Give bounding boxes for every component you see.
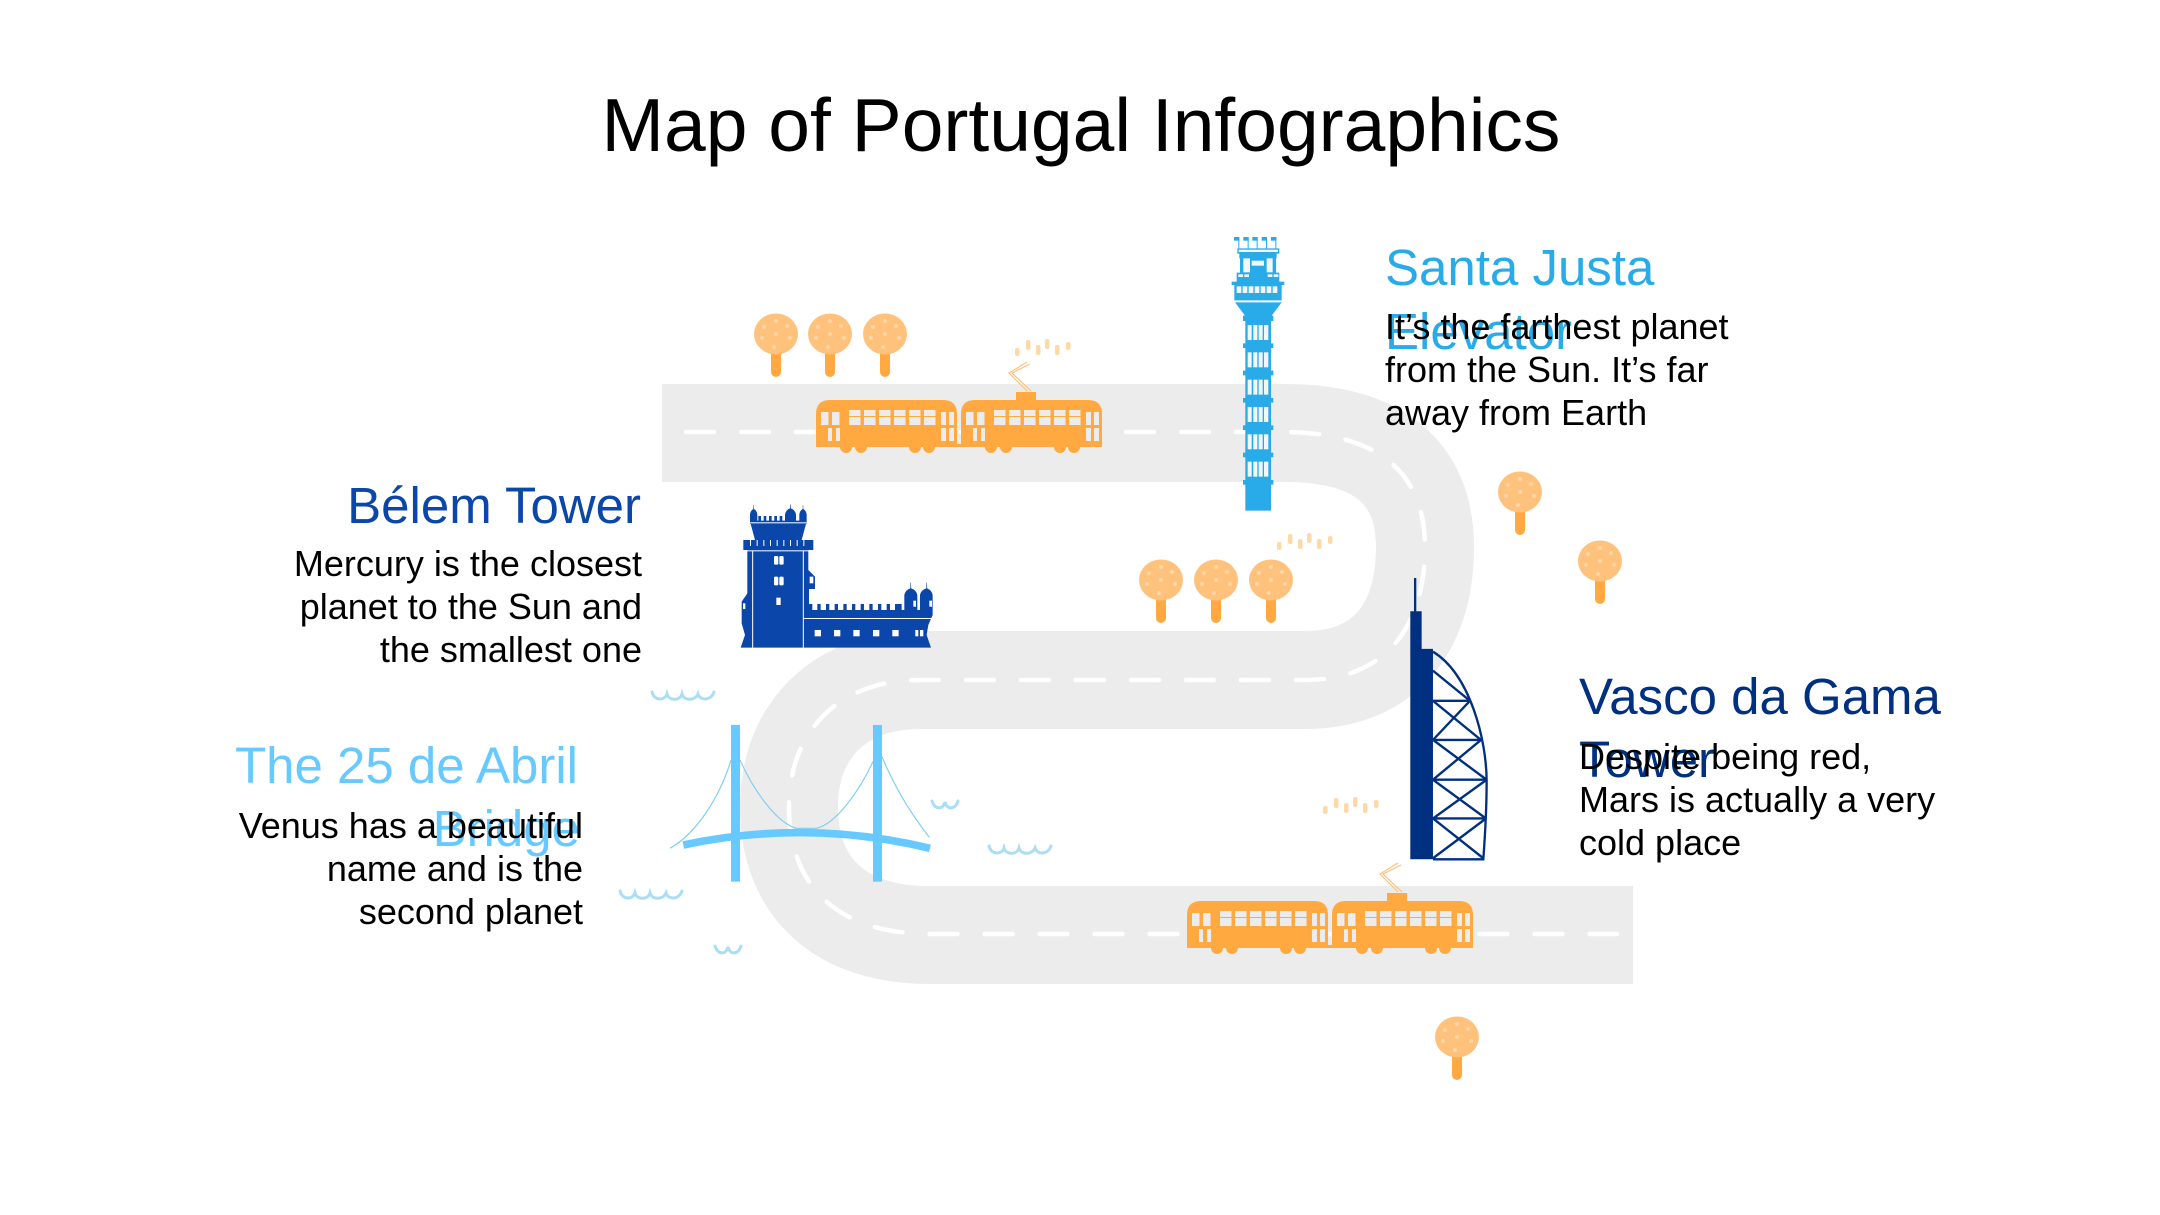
ticks: above middle trees xyxy=(1277,533,1332,550)
text block: 25 de Abril Bridge: name and is the xyxy=(327,848,583,889)
road xyxy=(662,432,1633,935)
title: Map of Portugal Infographics xyxy=(602,83,1560,167)
text block: Vasco da Gama Tower xyxy=(1579,668,1942,863)
icon: Belem Tower xyxy=(741,504,933,648)
waves: left of bridge xyxy=(620,891,682,898)
tram: top road xyxy=(816,362,1102,453)
text block: 25 de Abril Bridge: Venus has a beautiful xyxy=(239,805,583,846)
tree: right upper xyxy=(1498,472,1542,535)
text block: Santa Justa Elevator: Santa Justa xyxy=(1385,239,1655,296)
text block: Vasco da Gama Tower: cold place xyxy=(1579,822,1741,863)
text block: Belem Tower: planet to the Sun and xyxy=(300,586,642,627)
text block: Vasco da Gama Tower: Tower xyxy=(1579,731,1715,788)
ticks: left of Vasco da Gama tower xyxy=(1323,797,1378,814)
text block: Belem Tower: Mercury is the closest xyxy=(294,543,642,584)
text block: Vasco da Gama Tower: Vasco da Gama xyxy=(1579,668,1942,725)
waves: below bridge xyxy=(715,946,741,953)
trees: top row xyxy=(754,314,907,377)
text block: Vasco da Gama Tower: Mars is actually a very xyxy=(1579,779,1935,820)
tram: bottom road xyxy=(1187,863,1473,954)
text block: 25 de Abril Bridge: Bridge xyxy=(433,800,580,857)
tree: bottom xyxy=(1435,1016,1479,1080)
text block: 25 de Abril Bridge xyxy=(235,737,583,932)
text block: Vasco da Gama Tower: Despite being red, xyxy=(1579,736,1871,777)
waves: right of bridge wide xyxy=(989,846,1051,853)
ticks: above top tram xyxy=(1015,339,1070,356)
text block: Santa Justa Elevator: from the Sun. It’s far xyxy=(1385,349,1708,390)
text block: Santa Justa Elevator: away from Earth xyxy=(1385,392,1647,433)
text block: Belem Tower: Bélem Tower xyxy=(347,477,641,534)
text block: Santa Justa Elevator xyxy=(1385,239,1729,433)
text block: Santa Justa Elevator: It’s the farthest planet xyxy=(1385,306,1729,347)
icon: Vasco da Gama Tower xyxy=(1410,578,1487,859)
icon: 25 de Abril Bridge xyxy=(670,725,930,882)
waves: above bridge xyxy=(652,692,714,699)
text block: Santa Justa Elevator: Elevator xyxy=(1385,303,1572,360)
text block: Belem Tower xyxy=(294,477,642,670)
waves: right of bridge small xyxy=(932,801,958,808)
text block: 25 de Abril Bridge: second planet xyxy=(359,891,583,932)
text block: Belem Tower: the smallest one xyxy=(380,629,642,670)
trees: middle row xyxy=(1139,560,1293,623)
text block: 25 de Abril Bridge: The 25 de Abril xyxy=(235,737,578,794)
icon: Santa Justa Elevator xyxy=(1232,237,1284,511)
tree: right lower xyxy=(1578,540,1622,604)
